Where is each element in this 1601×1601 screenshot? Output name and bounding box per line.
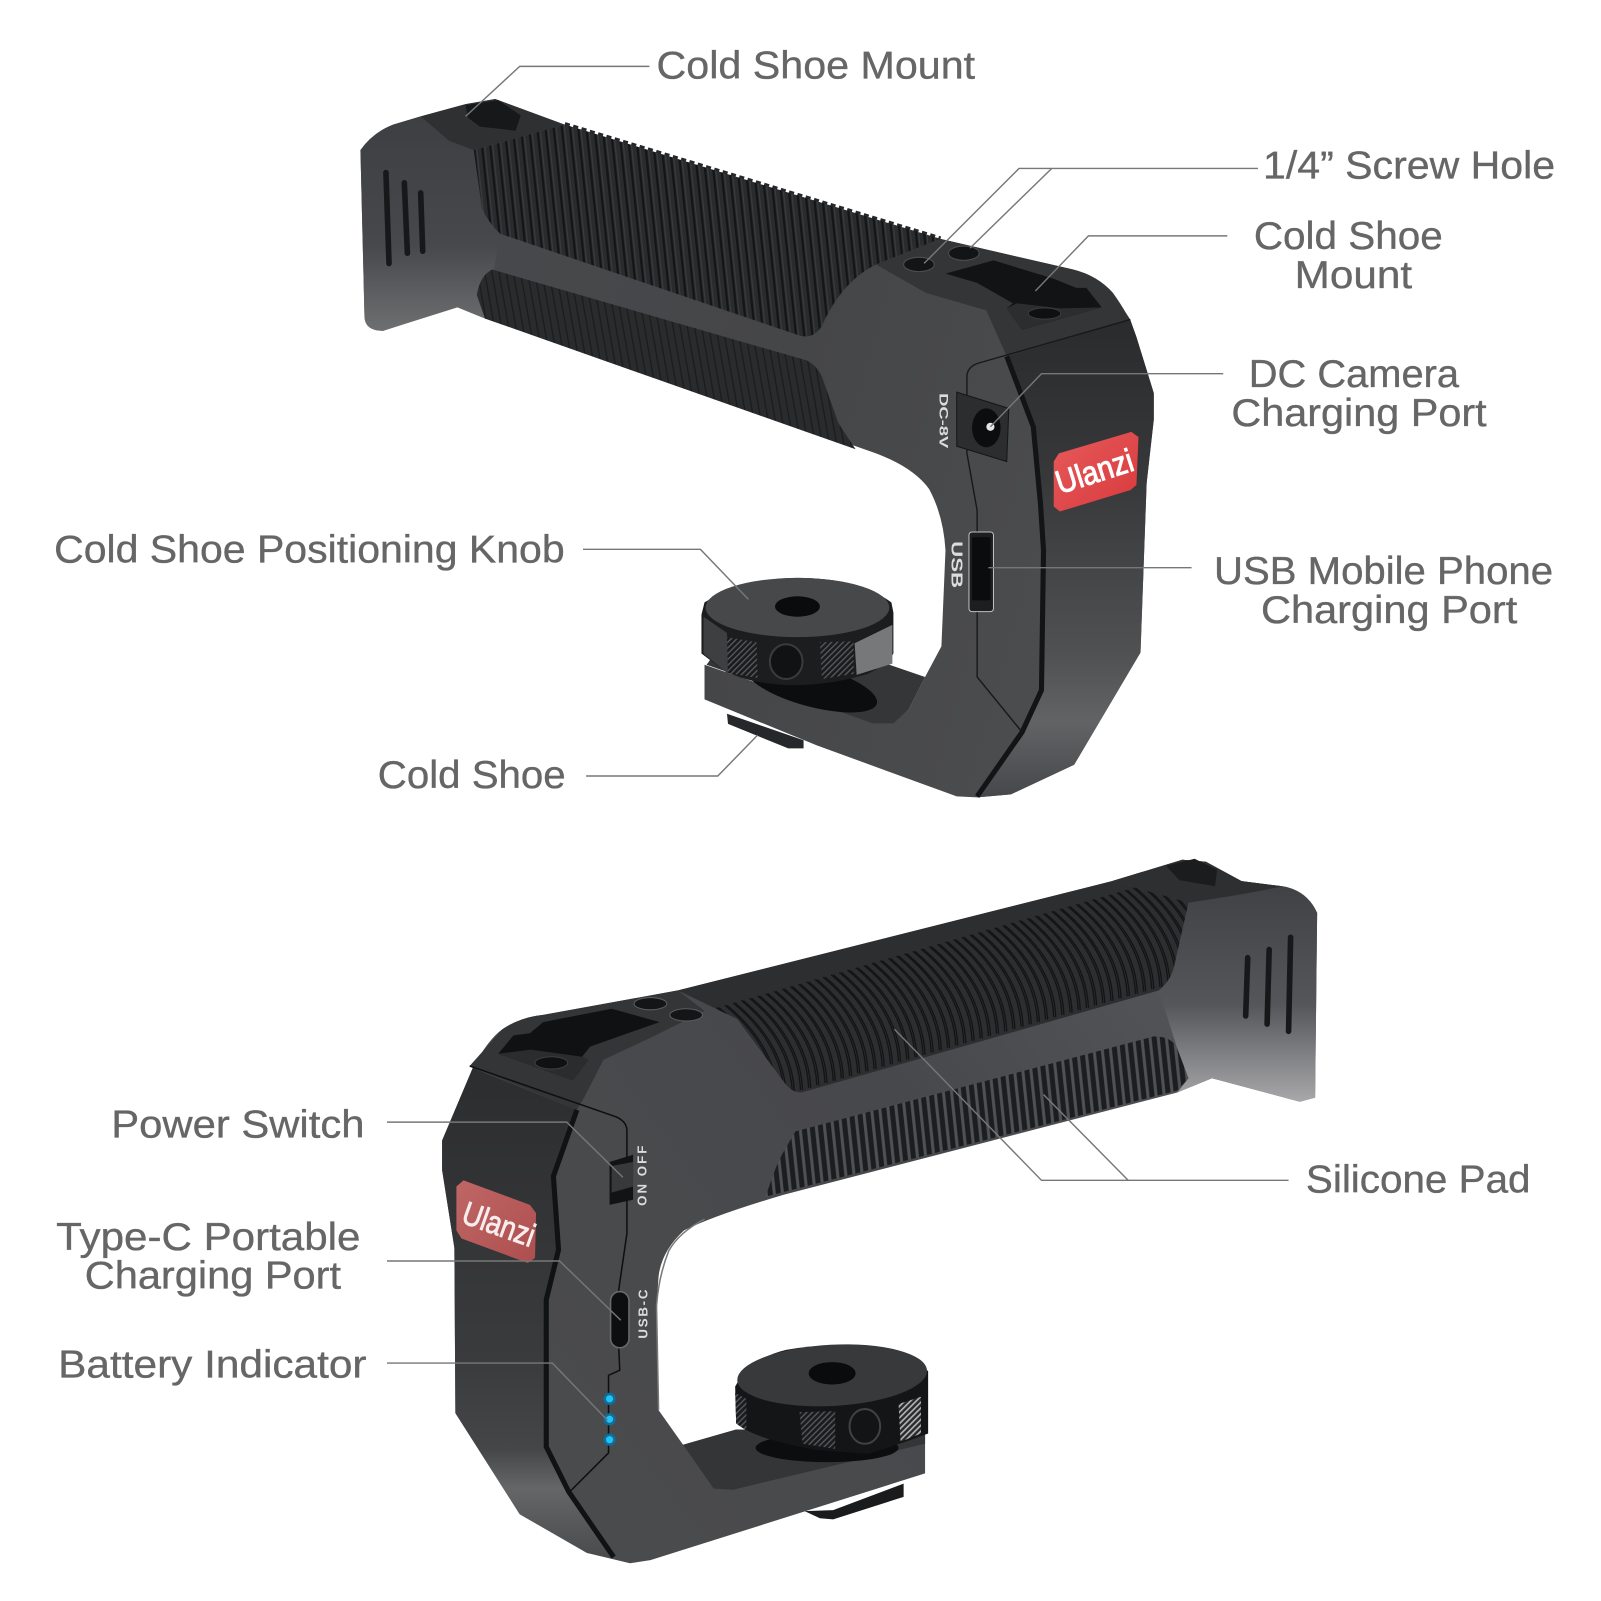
label: Cold Shoe: Cold Shoe bbox=[378, 754, 566, 797]
label: Cold Shoe Positioning Knob: Cold Shoe Positioning Knob bbox=[54, 529, 565, 572]
recess plate bbox=[498, 1050, 588, 1080]
handle body bbox=[442, 860, 1317, 1563]
arm top surface bbox=[707, 653, 925, 723]
label: 1/4 inch Screw Hole: 1/4” Screw Hole bbox=[1263, 145, 1555, 188]
front face bbox=[977, 320, 1154, 797]
label: Silicone Pad: Silicone Pad bbox=[1306, 1159, 1531, 1202]
USB-C text: USB-C bbox=[635, 1289, 650, 1339]
groove band bbox=[977, 356, 1044, 796]
knob shadow bbox=[756, 1434, 899, 1462]
handle end bbox=[1112, 860, 1317, 1102]
label: USB Mobile Phone Charging Port bbox=[1214, 550, 1553, 632]
handle end bbox=[360, 116, 500, 331]
battery LEDs bbox=[603, 1393, 616, 1446]
logo badge bbox=[456, 1180, 540, 1263]
cold shoe recess bbox=[498, 1009, 660, 1080]
vents bbox=[1246, 937, 1291, 1031]
DC port bbox=[957, 392, 1009, 462]
label: USB Mobile Phone Charging Port: USB Mobile Phone bbox=[1214, 550, 1553, 593]
screw holes bbox=[904, 246, 979, 272]
power switch bbox=[610, 1155, 633, 1205]
label: Cold Shoe Mount (top): Cold Shoe bbox=[1254, 215, 1443, 258]
knob shadow bbox=[741, 649, 882, 723]
top surface of head bbox=[470, 990, 705, 1110]
arm top surface bbox=[683, 1429, 925, 1490]
logo badge: Ulanzi bbox=[458, 1194, 540, 1254]
label: DC Camera Charging Port: Charging Port bbox=[1231, 392, 1487, 435]
product: upper handle bbox=[360, 99, 1154, 797]
lower ribbed grip bbox=[766, 1036, 1188, 1197]
upper ribbed grip bbox=[678, 881, 1188, 1092]
label: Cold Shoe Mount (top) bbox=[1254, 215, 1443, 297]
label: Cold Shoe Mount (rear): Cold Shoe Mount bbox=[657, 45, 975, 88]
inner curve highlight bbox=[657, 1219, 705, 1410]
panel seam bbox=[967, 320, 1130, 732]
USB text: USB bbox=[948, 541, 965, 588]
label: Type-C Portable Charging Port: Type-C Portable bbox=[56, 1216, 360, 1259]
rear cold shoe mount bbox=[466, 100, 521, 131]
top mount surface at end bbox=[1112, 860, 1282, 903]
label: Battery Indicator: Battery Indicator bbox=[58, 1343, 367, 1386]
cold shoe foot bbox=[805, 1484, 904, 1519]
label: DC Camera Charging Port: DC Camera bbox=[1249, 353, 1460, 396]
serrated grip ridge bbox=[565, 125, 940, 239]
top surface of head bbox=[876, 239, 1130, 356]
screw holes bbox=[634, 998, 702, 1021]
label: Type-C Portable Charging Port bbox=[56, 1216, 360, 1298]
DC-8V text: DC-8V bbox=[936, 393, 950, 449]
panel seam bbox=[470, 1066, 627, 1492]
upper ribbed grip bbox=[474, 125, 940, 336]
positioning knob bbox=[701, 578, 893, 685]
logo badge: Ulanzi bbox=[1051, 441, 1138, 501]
label: DC Camera Charging Port bbox=[1231, 353, 1487, 435]
handle body bbox=[360, 99, 1154, 797]
groove band bbox=[546, 1110, 614, 1557]
product: lower handle bbox=[442, 859, 1317, 1563]
recess hole bbox=[535, 1057, 568, 1069]
positioning knob bbox=[735, 1340, 929, 1454]
label: Cold Shoe Mount (top): Mount bbox=[1295, 254, 1412, 297]
rear cold shoe mount bbox=[1166, 859, 1217, 886]
lower ribbed grip bbox=[477, 270, 856, 449]
USB port bbox=[969, 532, 993, 612]
top mount surface at end bbox=[421, 99, 565, 150]
recess plate bbox=[1007, 303, 1102, 330]
front face bbox=[442, 1068, 614, 1557]
label: Type-C Portable Charging Port: Charging Port bbox=[85, 1255, 341, 1298]
recess hole bbox=[1028, 308, 1061, 319]
vents bbox=[386, 173, 423, 263]
label: Power Switch: Power Switch bbox=[111, 1103, 365, 1146]
label: USB Mobile Phone Charging Port: Charging Port bbox=[1261, 589, 1518, 632]
ON OFF text: ON OFF bbox=[634, 1146, 649, 1206]
cold shoe foot bbox=[727, 714, 804, 748]
USB-C port bbox=[611, 1292, 629, 1348]
cold shoe recess bbox=[945, 260, 1102, 330]
leader lines bbox=[387, 66, 1289, 1420]
